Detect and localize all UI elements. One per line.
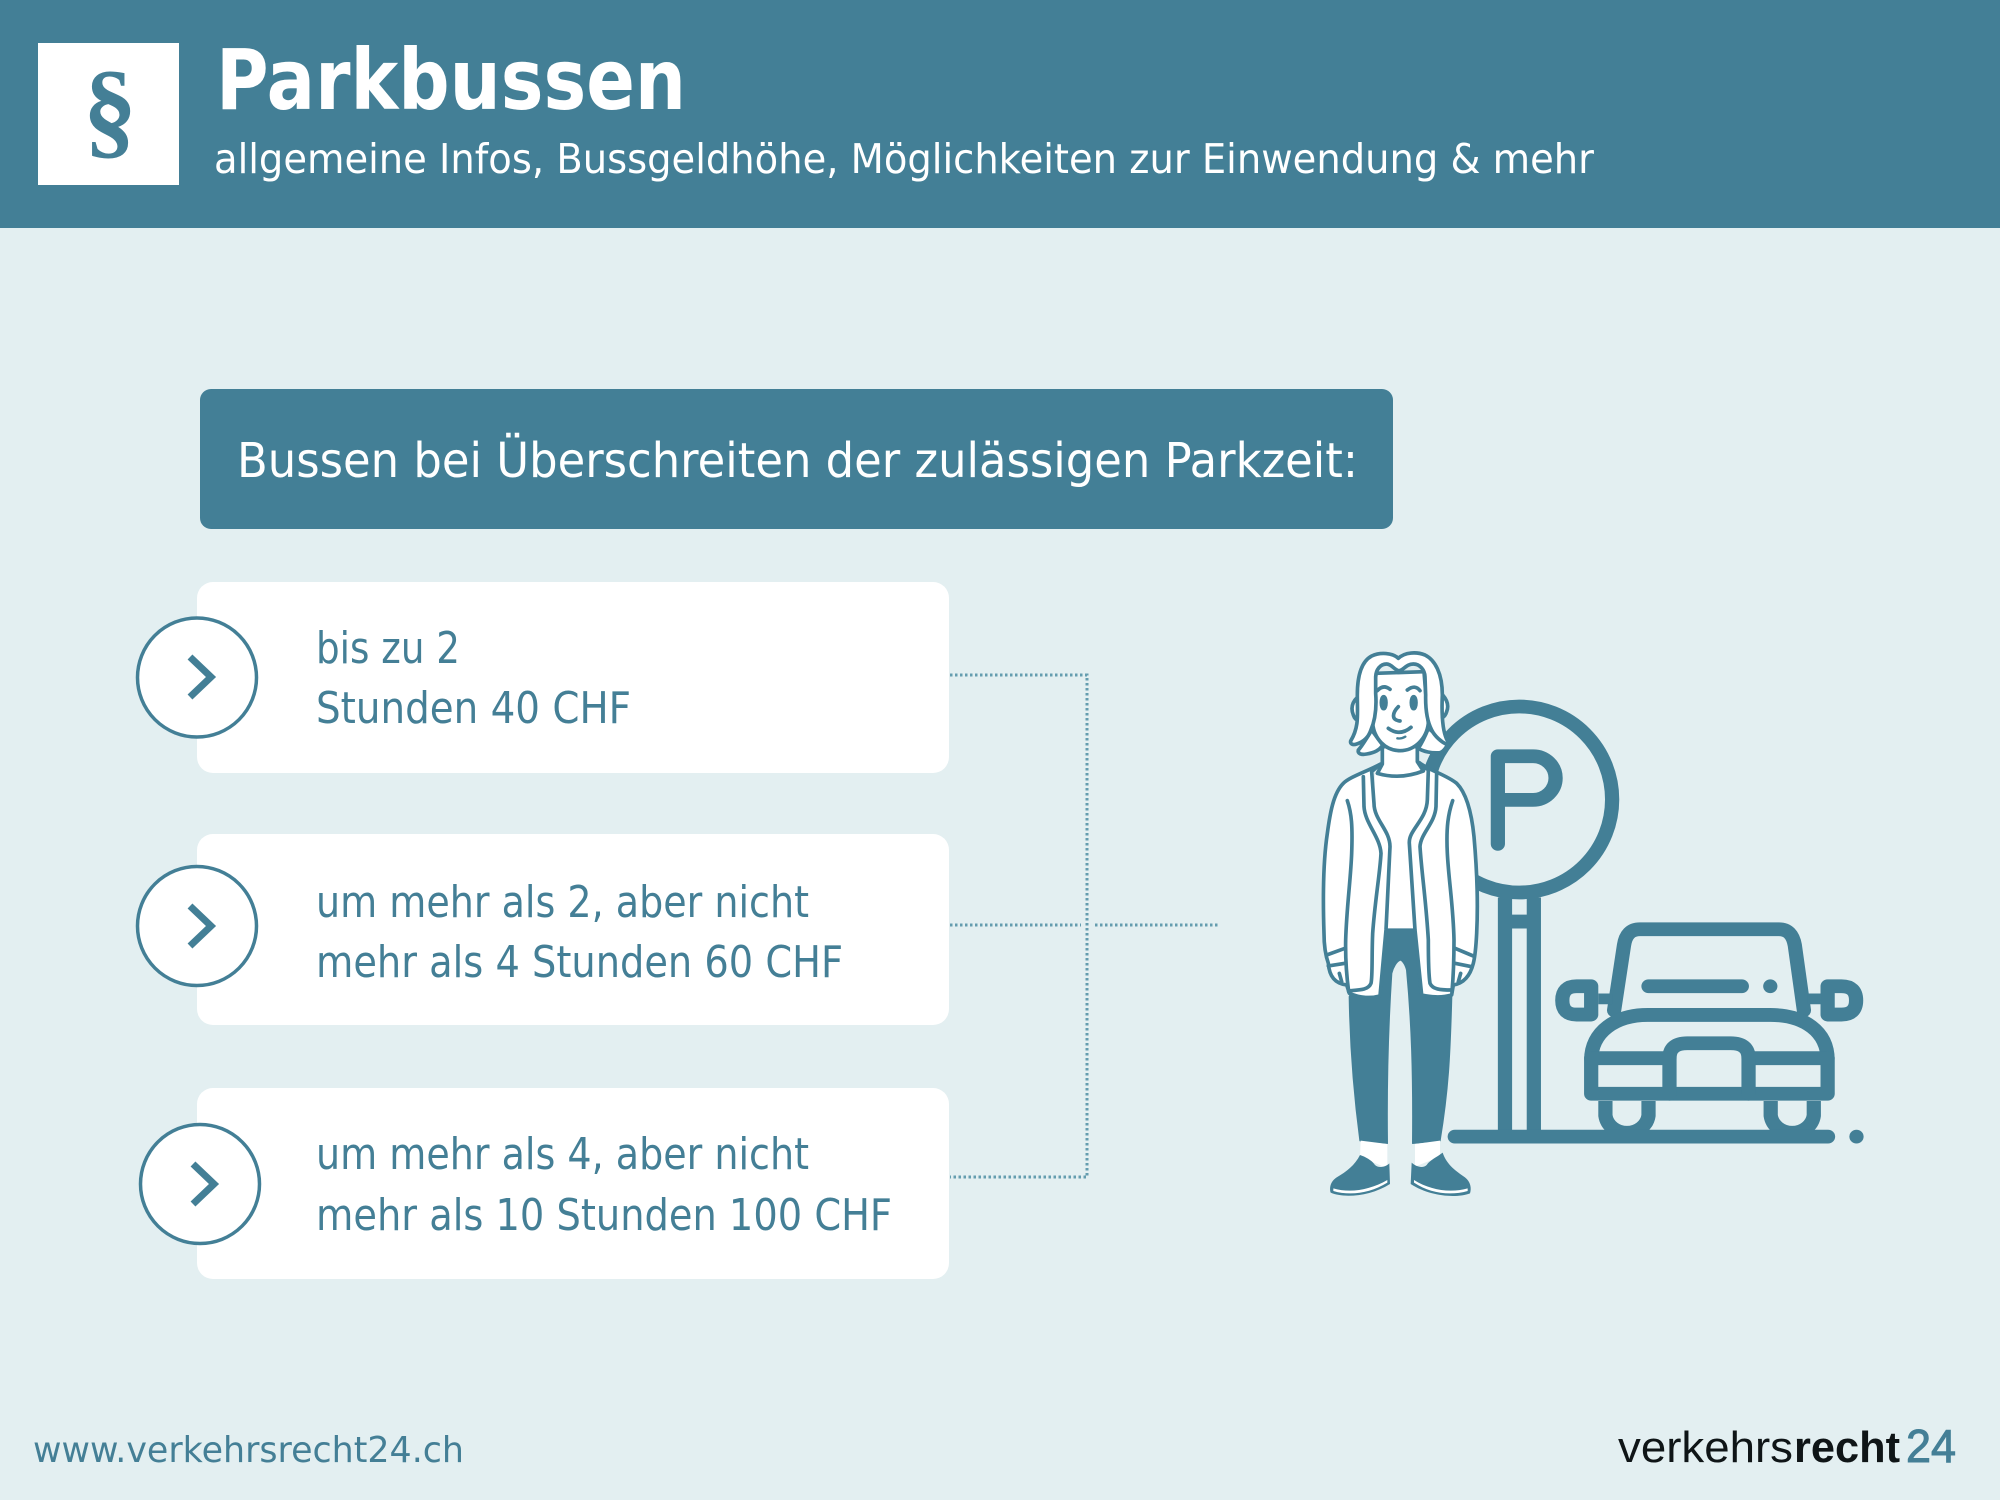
head and hair [1351,653,1448,754]
card: 4 to 10 hours [140,1088,949,1279]
illustration: parking sign and car [1426,706,1864,1144]
illustration: standing person [1323,653,1477,1196]
dots [1763,979,1864,1144]
text: 4 to 10 hours fine: um mehr als 4, aber nicht [316,1129,809,1180]
text: up to 2 hours fine: Stunden 40 CHF [316,683,631,734]
subtitle: allgemeine Infos, Bussgeldhöhe, Möglichkeiten zur Einwendung & mehr [214,135,1594,183]
card: 2 to 4 hours [138,834,949,1025]
jacket and shirt [1323,747,1477,998]
icon: chevron circle [138,618,256,737]
text: 4 to 10 hours fine: mehr als 10 Stunden 100 CHF [316,1190,892,1241]
footer logo [1618,1420,1956,1472]
icon: paragraph sign: § [83,50,137,169]
icon: parking sign [1426,706,1612,1135]
icon: paragraph sign [38,43,179,185]
footer url: www.verkehrsrecht24.ch [33,1430,464,1471]
icon: car [1562,929,1856,1133]
text: 2 to 4 hours fine: mehr als 4 Stunden 60 CHF [316,937,843,988]
heading banner [200,389,1393,529]
connector lines [950,675,1218,1177]
footer logo: 24 [1906,1420,1956,1472]
header band [0,0,2000,228]
heading banner: Bussen bei Überschreiten der zulässigen Parkzeit: [237,433,1358,489]
title: Parkbussen [216,31,686,129]
trousers [1349,927,1452,1143]
ground line [1455,1119,1828,1155]
socks and shoes [1330,1141,1471,1196]
icon: chevron circle [138,866,256,986]
text: 2 to 4 hours fine: um mehr als 2, aber nicht [316,877,809,928]
card: up to 2 hours [138,582,949,773]
footer logo: recht [1794,1423,1900,1472]
icon: chevron circle [140,1124,260,1244]
text: up to 2 hours fine: bis zu 2 [316,623,460,674]
footer logo: verkehrs [1618,1423,1793,1472]
